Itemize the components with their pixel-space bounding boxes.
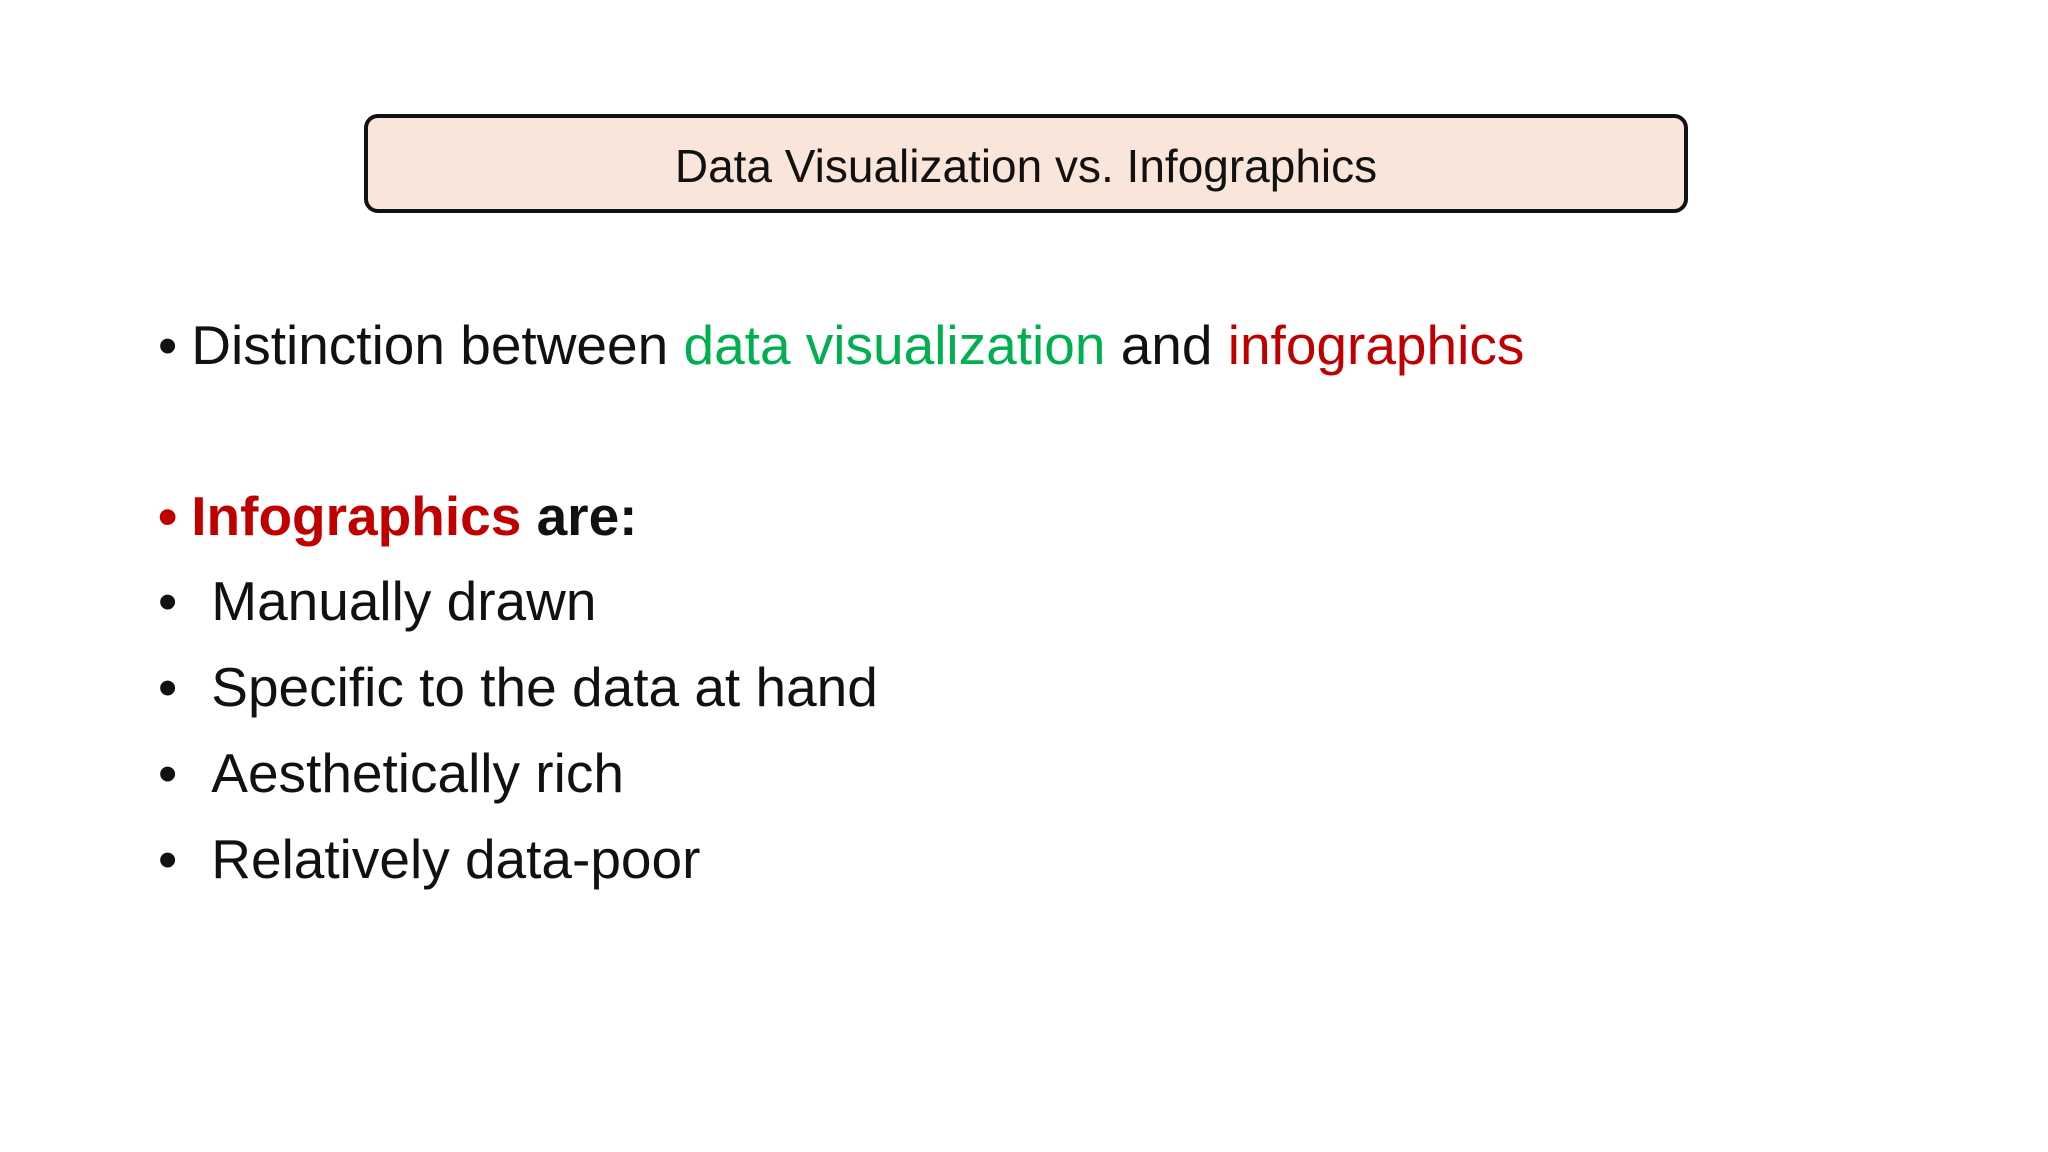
title [364,114,1688,213]
item: manually drawn: • Manually drawn [158,570,596,632]
list: infographic properties [158,570,878,890]
title: Data Visualization vs. Infographics [675,140,1377,192]
heading: infographics are: • Infographics are: [158,485,637,547]
item: specific: • Specific to the data at hand [158,656,878,718]
item: aesthetically rich: • Aesthetically rich [158,742,624,804]
item: data-poor: • Relatively data-poor [158,828,700,890]
bullet: distinction: • Distinction between data visualization and infographics [158,314,1524,376]
